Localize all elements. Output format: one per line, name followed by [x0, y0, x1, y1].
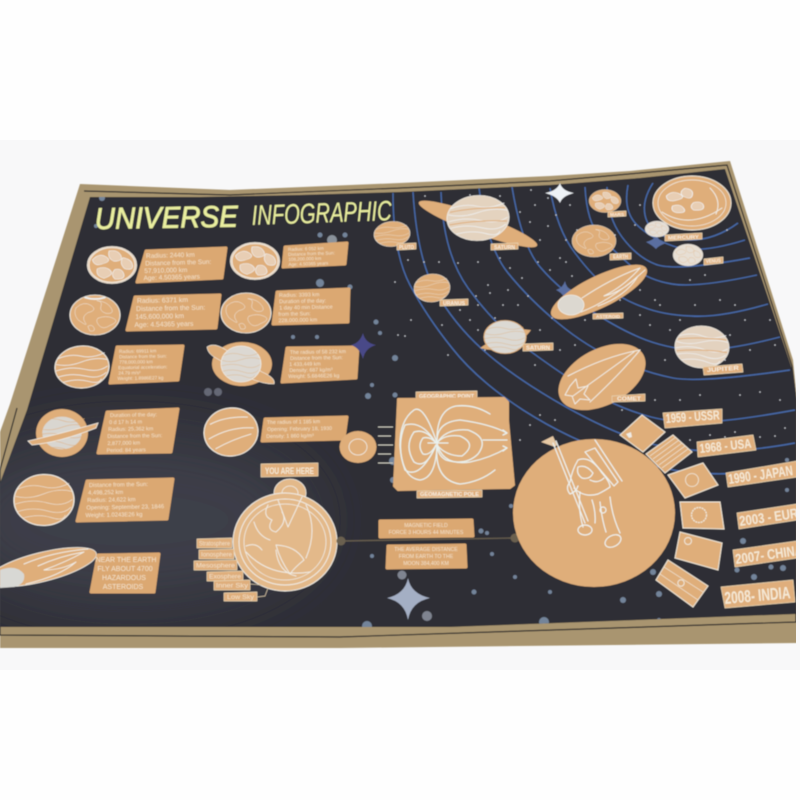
planet: neptune fact [201, 404, 261, 460]
panel: uranus text: 0 d 17 h 14 m [109, 419, 143, 426]
title [95, 195, 393, 236]
panel: mars text: Duration of the day: [279, 298, 326, 305]
planet: earth fact [70, 295, 120, 335]
panel: venus text [283, 243, 347, 267]
panel: striped world text: 4,498,252 km [88, 490, 123, 497]
panel: mars text: Radius: 3393 km [279, 292, 320, 299]
list: atmosphere layers: Mesosphere [196, 564, 236, 570]
star: large pale [387, 578, 430, 620]
panel: earth text: Distance from the Sun: [136, 305, 205, 313]
panel: earth text: Radius: 6371 km [137, 297, 188, 305]
planet: jupiter fact [54, 344, 110, 390]
label: saturn [491, 243, 518, 251]
star: blue lower [556, 281, 572, 297]
panel: uranus text: Distance from the Sun: [107, 433, 162, 440]
panel: jupiter text: 24.79 m/s² [118, 370, 141, 376]
label: you are here [261, 463, 318, 477]
divider line with nodes [336, 534, 520, 546]
panel: earth text: 145,600,000 km [135, 313, 184, 321]
soft lighter patch [0, 430, 320, 610]
panel: venus text: Radius: 6 052 km [288, 246, 324, 252]
panel: venus text: Distance from the Sun: [288, 250, 335, 257]
photo margin right [796, 140, 800, 670]
star: blue mid [646, 235, 666, 249]
label: top rocky [608, 211, 626, 217]
panel: mercury text: 57,910,000 km [144, 267, 187, 275]
planet: earth on orbit [572, 225, 616, 257]
list: atmosphere layers: Low Sky [227, 595, 254, 601]
list: atmosphere layers: Inner Sky [216, 584, 248, 590]
panel: neptune text: The radius of 1 185 km [267, 419, 320, 426]
planet: uranus fact [28, 409, 98, 457]
label: 1959 ussr [663, 407, 722, 428]
orbit lines [393, 183, 795, 474]
panel: moon distance text: FROM EARTH TO THE [399, 554, 454, 560]
label: venus: VENUS [706, 258, 722, 265]
label: pluto [397, 243, 416, 251]
list: atmosphere layers [194, 538, 268, 601]
icon: earth locator pendant [233, 479, 337, 591]
label: 1968 usa: 1968 - USA [699, 436, 752, 456]
planet: mars fact [221, 293, 271, 333]
planet: mercury on orbit [645, 221, 669, 237]
flag: japan [668, 463, 718, 498]
label: comet upper [593, 313, 623, 319]
label: uranus: URANUS [443, 301, 466, 307]
flag: china [675, 532, 722, 570]
label: jupiter [703, 364, 743, 375]
panel: jupiter text: 778,000,000 km [119, 359, 153, 365]
panel: solar wind text: MAGNETIC FIELD [404, 523, 448, 529]
panel: asteroid text [91, 554, 159, 592]
list: atmosphere layers: Exosphere [209, 574, 242, 580]
panel: mars text [273, 289, 349, 324]
panel: neptune text: Opening: February 18, 1930 [267, 426, 332, 433]
panel: striped world text: Weight: 1.0243E26 kg [85, 512, 142, 519]
sun [653, 176, 731, 230]
icon: moon disc [340, 431, 376, 463]
star: white [545, 183, 574, 203]
planet: striped world [13, 473, 75, 527]
label: uranus [440, 299, 468, 307]
label: mercury: MERCURY [668, 234, 700, 241]
panel: striped world text: Radius: 24,622 km [87, 497, 136, 504]
icon: asteroid left [0, 539, 100, 595]
label: saturn: SATURN [494, 245, 515, 251]
planet: saturn on orbit with ring [416, 194, 540, 254]
list: atmosphere layers: Ionosphere [201, 552, 233, 558]
panel: solar wind text [380, 520, 473, 537]
panel: jupiter text: Radius: 69911 km [119, 348, 157, 354]
panel: mars text: 228,000,000 km [278, 317, 318, 324]
label: magnetic north pole: GEOGRAPHIC POINT [419, 394, 474, 400]
panel: mars text: 1 day 40 min Distance [279, 304, 333, 312]
panel: neptune text [262, 417, 347, 441]
panel: uranus text: Period: 84 years [107, 447, 146, 454]
panel: uranus text: Duration of the day: [110, 412, 157, 419]
panel: asteroid text: NEAR THE EARTH [96, 557, 156, 564]
flag: india [656, 560, 708, 607]
panel: asteroid text: ASTEROIDS [103, 584, 144, 591]
label: small ringed: SATURN [526, 346, 550, 352]
panel: earth text: Age: 4.54365 years [134, 321, 194, 329]
panel: saturn text: Density: 687 kg/m³ [289, 367, 333, 374]
panel: saturn text: The radius of 58 232 km [290, 349, 346, 356]
dust dots [94, 195, 789, 631]
panel: uranus text [98, 409, 178, 454]
panel: moon distance text: THE AVERAGE DISTANCE [394, 547, 458, 553]
label: top rocky: MARS [610, 212, 624, 217]
panel: mercury text: Distance from the Sun: [145, 259, 212, 268]
icon: comet lower [547, 330, 657, 424]
diagram: magnetic field [378, 391, 514, 498]
label: mercury [665, 233, 702, 241]
planet: top rocky [589, 190, 621, 212]
panel: neptune text: Density: 1 860 kg/m³ [266, 433, 314, 440]
panel: earth text [127, 295, 220, 330]
label: jupiter: JUPITER [707, 366, 740, 374]
panel: saturn text [282, 347, 358, 382]
panel: jupiter text: Weight: 1.8986E27 kg [117, 375, 164, 381]
panel: venus text: Age: 4.50365 years [288, 261, 329, 267]
planet: small ringed [480, 320, 531, 354]
panel: uranus text: 2,877,000 km [107, 440, 141, 447]
list: atmosphere layers: Stratosphere [199, 542, 231, 548]
title: UNIVERSE [95, 200, 239, 236]
star field [394, 188, 786, 442]
panel: saturn text: 1 433,449 km [289, 361, 321, 368]
label: small ringed [523, 343, 553, 352]
planet: uranus orbit [413, 272, 451, 304]
dark poster field [0, 169, 796, 627]
panel: saturn text: Distance from the Sun: [290, 355, 343, 362]
label: earth [610, 253, 631, 260]
planet: jupiter on orbit [674, 325, 730, 369]
flag: usa [646, 435, 692, 473]
panel: asteroid text: FLY ABOUT 4700 [97, 566, 153, 573]
planet: mercury fact [88, 246, 136, 284]
panel: uranus text: Radius: 25,362 km [108, 426, 154, 433]
star: purple [351, 333, 376, 359]
panel: jupiter text: Distance from the Sun: [119, 354, 167, 359]
panel: moon distance text: MOON 384,400 KM [403, 561, 449, 567]
panel: striped world text: Distance from the Sun: [89, 482, 148, 489]
arrows: solar wind [378, 427, 393, 463]
label: you are here: YOU ARE HERE [265, 466, 314, 476]
panel: asteroid text: HAZARDOUS [102, 575, 146, 582]
label: comet upper: ASTEROID [596, 314, 621, 319]
panel: saturn text: Weight: 5.6846E26 kg [288, 373, 340, 380]
title: INFOGRAPHIC [251, 195, 393, 231]
panel: striped world text: Opening: September 23, 1846 [86, 504, 164, 512]
moon with astronaut [513, 436, 675, 587]
poster frame [0, 161, 797, 648]
panel: jupiter text: Equatorial acceleration: [118, 364, 167, 370]
label: pluto: PLUTO [399, 245, 414, 251]
panel: mercury text [137, 248, 226, 282]
label: comet lower [612, 394, 645, 402]
planet: venus fact [230, 242, 280, 280]
label: geographic south pole: GEOMAGNETIC POLE [420, 492, 480, 498]
planet: venus on orbit [673, 244, 703, 266]
planet: pluto [373, 220, 411, 248]
panel: mercury text: Age: 4.50365 years [143, 274, 201, 282]
panel: mercury text: Radius: 2440 km [146, 252, 195, 260]
planet: saturn fact [207, 342, 274, 386]
flag: ussr [620, 415, 665, 452]
panel: mars text: from the Sun: [278, 311, 311, 318]
panel: venus text: 108,200,000 km [288, 256, 321, 262]
label: 1959 ussr: 1959 - USSR [665, 407, 721, 426]
panel: jupiter text [110, 346, 183, 383]
label: earth: EARTH [613, 254, 628, 260]
panel: striped world text [77, 479, 173, 521]
flag: europe [680, 502, 724, 529]
icon: comet upper [544, 254, 654, 330]
panel: solar wind text: FORCE 3 HOURS 44 MINUTES [389, 530, 464, 536]
label: comet lower: COMET [617, 396, 641, 402]
panel: moon distance text [387, 545, 466, 568]
